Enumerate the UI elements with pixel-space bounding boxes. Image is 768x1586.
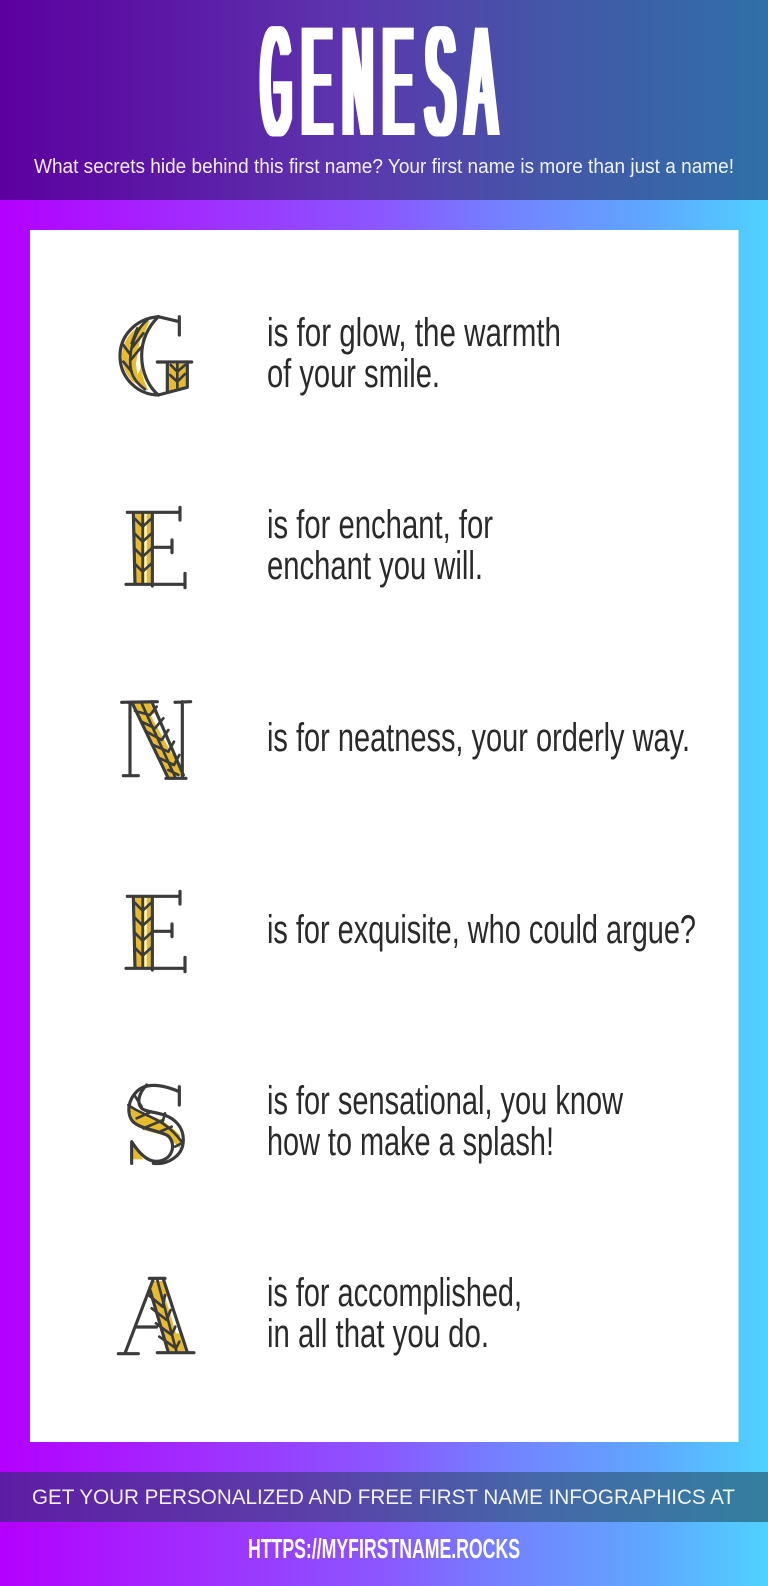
text: A line	[267, 1271, 522, 1356]
title	[262, 0, 496, 169]
icon: letter A	[118, 1278, 194, 1354]
text: G line: of your smile.	[267, 352, 440, 396]
text: A line: is for accomplished,	[267, 1271, 522, 1315]
icon: letter E second	[126, 891, 185, 972]
text: S line	[267, 1079, 623, 1164]
footer call to action: GET YOUR PERSONALIZED AND FREE FIRST NAME INFOGRAPHICS AT	[32, 1485, 735, 1509]
text: S line: how to make a splash!	[267, 1120, 554, 1164]
text: A line: in all that you do.	[267, 1312, 489, 1356]
footer band	[0, 1472, 768, 1522]
title: N	[343, 0, 372, 169]
text: S line: is for sensational, you know	[267, 1079, 623, 1123]
title: E	[383, 0, 412, 169]
icon: letter N	[122, 702, 191, 778]
footer link: HTTPS://MYFIRSTNAME.ROCKS	[248, 1533, 520, 1564]
panel: letters	[30, 230, 738, 1442]
icon: letter G	[120, 317, 192, 395]
subtitle: What secrets hide behind this first name? Your first name is more than just a name!	[34, 156, 734, 178]
text: G line: is for glow, the warmth	[267, 311, 561, 355]
title: E	[302, 0, 332, 169]
text: E line: enchant you will.	[267, 544, 483, 588]
icon: letter S	[128, 1085, 183, 1164]
title: S	[426, 0, 455, 169]
icon: letter E	[126, 507, 185, 588]
header band	[0, 0, 768, 200]
text: E line: is for enchant, for	[267, 503, 493, 547]
text: A	[466, 0, 496, 169]
title: G	[262, 0, 291, 169]
text: E line	[267, 503, 493, 588]
text: G line	[267, 311, 561, 396]
